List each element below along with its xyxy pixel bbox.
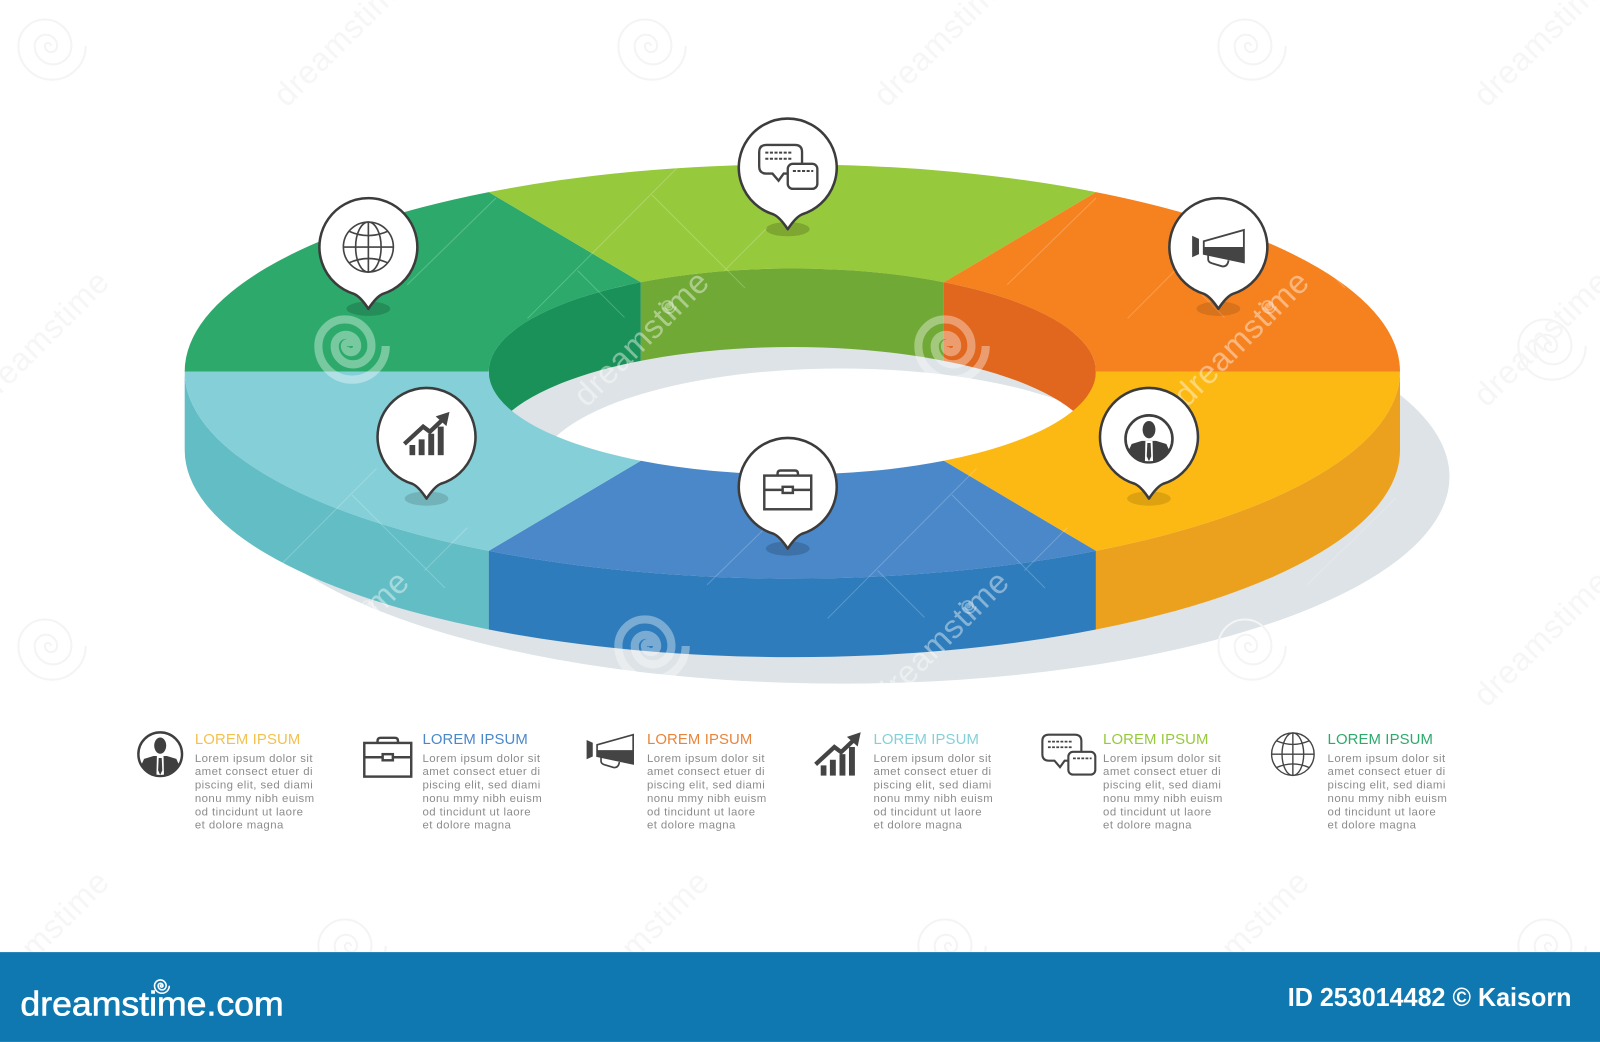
image id and credit: ID 253014482 © Kaisorn bbox=[1288, 984, 1571, 1012]
watermark text: dreamstime bbox=[1166, 263, 1316, 413]
body text: od tincidunt ut laore bbox=[195, 806, 303, 818]
segment: orange bbox=[944, 192, 1400, 372]
icon: growth chart bbox=[816, 732, 861, 776]
segment: yellow bbox=[944, 372, 1400, 551]
inner wall: green left bbox=[488, 282, 641, 411]
segment: dark green bbox=[185, 192, 641, 372]
heading: LOREM IPSUM bbox=[647, 732, 752, 748]
watermark text: dreamstime bbox=[266, 563, 416, 713]
inner wall: orange right bbox=[944, 282, 1096, 411]
legend item: megaphone bbox=[587, 732, 767, 832]
body text: nonu mmy nibh euism bbox=[195, 793, 315, 805]
body text: piscing elit, sed diami bbox=[195, 780, 313, 792]
body text: piscing elit, sed diami bbox=[1103, 780, 1221, 792]
outer wall: blue bbox=[489, 551, 1096, 657]
body text: nonu mmy nibh euism bbox=[1328, 793, 1447, 805]
body text: et dolore magna bbox=[1103, 820, 1192, 832]
pin: globe bbox=[319, 198, 417, 316]
body text: od tincidunt ut laore bbox=[1328, 806, 1436, 818]
body text: et dolore magna bbox=[647, 820, 736, 832]
legend item: person bbox=[138, 732, 315, 832]
body text: od tincidunt ut laore bbox=[1103, 806, 1212, 818]
watermark text: dreamstime bbox=[566, 863, 716, 1013]
outer wall: yellow bbox=[1096, 372, 1400, 629]
body text: amet consect etuer di bbox=[195, 766, 313, 778]
icon: person bbox=[138, 732, 182, 777]
body text: Lorem ipsum dolor sit bbox=[873, 753, 992, 765]
segment: blue bbox=[489, 461, 1096, 579]
logo spiral bbox=[154, 980, 169, 993]
ring diagram bbox=[185, 164, 1400, 657]
body text: piscing elit, sed diami bbox=[422, 780, 541, 792]
body text: amet consect etuer di bbox=[647, 766, 765, 778]
pin: briefcase bbox=[739, 438, 837, 556]
pin: chat bbox=[739, 119, 837, 236]
watermark text: dreamstime bbox=[566, 263, 716, 413]
body text: Lorem ipsum dolor sit bbox=[422, 753, 541, 765]
body text: od tincidunt ut laore bbox=[422, 806, 531, 818]
body text: amet consect etuer di bbox=[1328, 766, 1446, 778]
heading: LOREM IPSUM bbox=[422, 732, 528, 748]
body text: nonu mmy nibh euism bbox=[422, 793, 542, 805]
legend item: growth chart bbox=[816, 732, 993, 832]
body text: et dolore magna bbox=[195, 820, 284, 832]
legend item: chat bbox=[1042, 732, 1223, 832]
body text: Lorem ipsum dolor sit bbox=[647, 753, 765, 765]
body text: amet consect etuer di bbox=[873, 766, 992, 778]
body text: od tincidunt ut laore bbox=[873, 806, 982, 818]
body text: et dolore magna bbox=[1328, 820, 1417, 832]
heading: LOREM IPSUM bbox=[1103, 732, 1209, 748]
body text: piscing elit, sed diami bbox=[873, 780, 992, 792]
body text: nonu mmy nibh euism bbox=[873, 793, 993, 805]
body text: nonu mmy nibh euism bbox=[1103, 793, 1223, 805]
body text: Lorem ipsum dolor sit bbox=[1328, 753, 1446, 765]
segment: teal bbox=[185, 372, 641, 551]
body text: piscing elit, sed diami bbox=[1328, 780, 1446, 792]
watermark text: dreamstime bbox=[1166, 863, 1316, 1013]
icon: megaphone bbox=[587, 735, 633, 768]
pin: person bbox=[1100, 388, 1198, 506]
body text: od tincidunt ut laore bbox=[647, 806, 756, 818]
segment: light green bbox=[489, 164, 1096, 282]
body text: nonu mmy nibh euism bbox=[647, 793, 767, 805]
body text: amet consect etuer di bbox=[422, 766, 541, 778]
icon: briefcase bbox=[364, 738, 411, 777]
heading: LOREM IPSUM bbox=[195, 732, 300, 748]
body text: Lorem ipsum dolor sit bbox=[1103, 753, 1221, 765]
body text: et dolore magna bbox=[873, 820, 963, 832]
brand logo text: dreamstime.com bbox=[20, 985, 284, 1023]
icon: chat bbox=[1042, 735, 1095, 775]
pin: growth chart bbox=[378, 388, 476, 506]
heading: LOREM IPSUM bbox=[1328, 732, 1433, 748]
watermark text: dreamstime bbox=[866, 563, 1016, 713]
legend item: briefcase bbox=[364, 732, 542, 832]
icon: globe bbox=[1272, 733, 1314, 775]
body text: piscing elit, sed diami bbox=[647, 780, 765, 792]
footer banner bbox=[0, 952, 1600, 1042]
body text: et dolore magna bbox=[422, 820, 512, 832]
heading: LOREM IPSUM bbox=[873, 732, 979, 748]
pin: megaphone bbox=[1169, 198, 1267, 316]
inner wall: green centre bbox=[640, 268, 944, 361]
body text: Lorem ipsum dolor sit bbox=[195, 753, 313, 765]
body text: amet consect etuer di bbox=[1103, 766, 1221, 778]
legend item: globe bbox=[1272, 732, 1447, 832]
drop shadow of ring bbox=[234, 270, 1449, 684]
outer wall: teal bbox=[185, 372, 489, 629]
